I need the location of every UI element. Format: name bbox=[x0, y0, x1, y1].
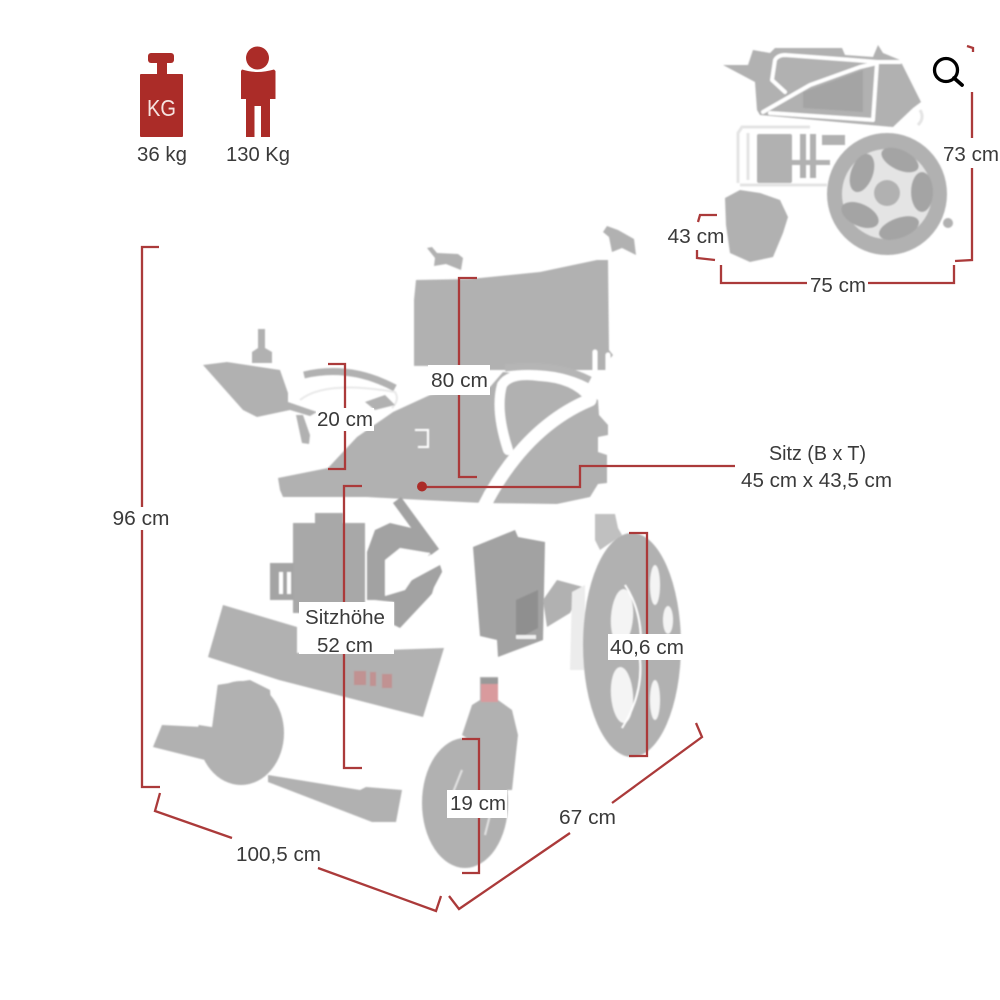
left armrest bbox=[304, 372, 395, 388]
dimension: seat height bbox=[299, 486, 394, 768]
callout: seat size: Sitz (B x T) bbox=[769, 443, 866, 465]
right battery bbox=[473, 530, 545, 657]
main wheelchair image bbox=[153, 226, 681, 868]
right armrest pad bbox=[505, 366, 590, 380]
dimension: armrest height bbox=[316, 364, 374, 469]
rear bracket bbox=[595, 514, 622, 550]
right footplate bbox=[268, 775, 402, 822]
dimension: armrest height: 20 cm bbox=[317, 409, 373, 431]
dimension: folded height: 73 cm bbox=[943, 144, 999, 166]
dimension: front wheel bbox=[447, 739, 507, 873]
rear wheel bbox=[583, 533, 681, 757]
motor bbox=[543, 580, 583, 627]
dimension: seat height: 52 cm bbox=[317, 635, 373, 657]
dimension: total length: 100,5 cm bbox=[236, 844, 321, 866]
left footplate bbox=[153, 725, 272, 765]
callout: seat size bbox=[417, 443, 892, 492]
backrest bbox=[414, 260, 613, 370]
dimension: backrest height: 80 cm bbox=[431, 370, 488, 392]
dimension: total height: 96 cm bbox=[112, 508, 170, 530]
label: max load: 130 Kg bbox=[226, 144, 290, 166]
dimension: rear wheel: 40,6 cm bbox=[610, 637, 684, 659]
dimension: seat height: Sitzhöhe bbox=[305, 607, 385, 629]
white frame bbox=[500, 375, 590, 450]
white strut lower bbox=[425, 495, 490, 640]
dimension: total width: 67 cm bbox=[559, 807, 616, 829]
dimension: total height bbox=[112, 247, 170, 787]
dimension: folded height bbox=[943, 46, 999, 261]
dimension: folded depth bbox=[668, 215, 724, 260]
seat hinge and cable bbox=[367, 523, 430, 600]
folded wheelchair image bbox=[723, 45, 953, 262]
icon: person bbox=[241, 46, 276, 137]
icon: weight: KG bbox=[147, 95, 176, 121]
seat side and back cushion bbox=[278, 372, 608, 504]
joystick controller bbox=[203, 329, 317, 444]
callout: seat size: 45 cm x 43,5 cm bbox=[741, 470, 892, 492]
dimension: backrest height bbox=[428, 278, 490, 477]
label: product weight: 36 kg bbox=[137, 144, 187, 166]
dimension: front wheel: 19 cm bbox=[450, 793, 506, 815]
red display digits bbox=[354, 671, 392, 688]
push handle left bbox=[427, 247, 463, 270]
dimension: folded depth: 43 cm bbox=[668, 226, 724, 248]
push handle right bbox=[603, 226, 636, 255]
rear wheel spokes bbox=[609, 565, 673, 724]
dimension: total width bbox=[449, 723, 702, 909]
icon: weight bbox=[140, 53, 183, 137]
dimension: rear wheel bbox=[608, 533, 685, 756]
front caster wheel bbox=[422, 738, 508, 868]
caster fork bbox=[462, 677, 518, 790]
left front wheel and bracket bbox=[198, 681, 284, 785]
icon: magnifier bbox=[934, 58, 962, 85]
dimension: total length bbox=[155, 793, 441, 911]
left battery bbox=[293, 513, 365, 613]
dimension: folded width bbox=[721, 265, 954, 297]
footrest flap bbox=[208, 605, 444, 717]
dimension: folded width: 75 cm bbox=[810, 275, 866, 297]
